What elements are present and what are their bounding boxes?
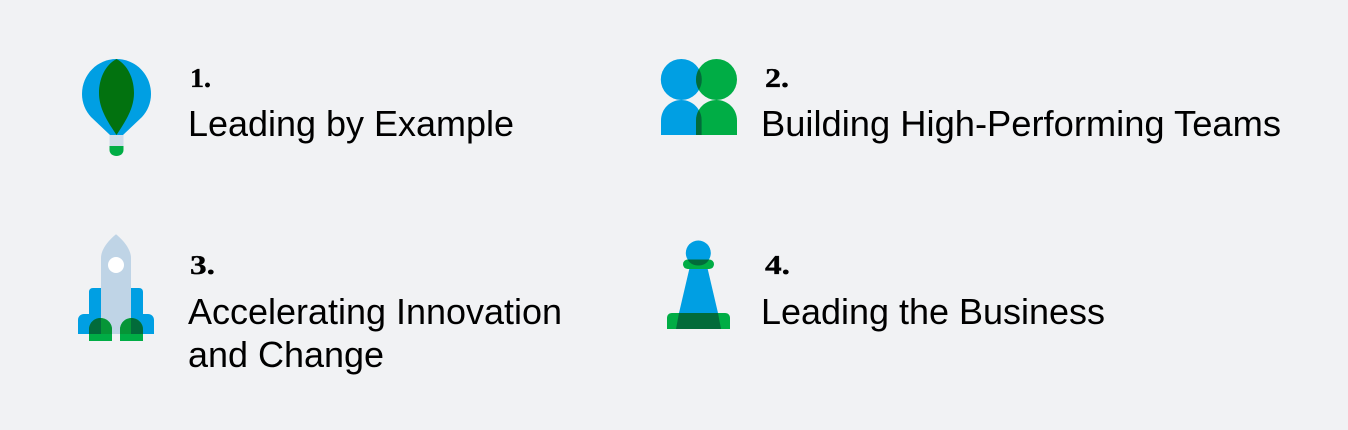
number 4: 4.: [765, 250, 790, 280]
panel: item 3: [78, 234, 562, 375]
heading: Accelerating Innovation and Change: [188, 291, 562, 375]
heading: Building High-Performing Teams: Building High-Performing Teams: [761, 103, 1281, 144]
icon: pawn: [667, 240, 730, 329]
icon: rocket: [78, 234, 154, 341]
heading: Accelerating Innovation and Change: and Change: [188, 334, 384, 375]
panel: item 1: [82, 59, 514, 156]
icon: two people: [661, 59, 737, 135]
panel: item 4: [667, 240, 1105, 332]
heading: Leading by Example: Leading by Example: [188, 103, 514, 144]
panel: item 2: [661, 59, 1281, 144]
icon: hot air balloon: [82, 59, 151, 156]
number 3: 3.: [190, 250, 215, 280]
number 1: 1.: [190, 63, 211, 93]
heading: Accelerating Innovation and Change: Accelerating Innovation: [188, 291, 562, 332]
number 2: 2.: [765, 63, 789, 93]
heading: Leading the Business: Leading the Business: [761, 291, 1105, 332]
